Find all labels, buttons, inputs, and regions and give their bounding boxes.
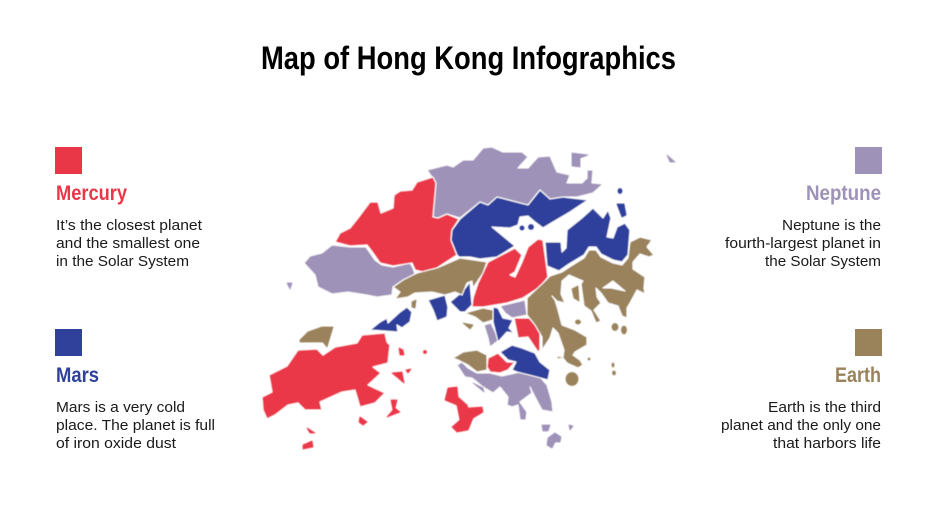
text: Neptune description: the Solar System [765,254,881,270]
text: Mercury description [56,218,202,270]
icon: Neptune colour swatch [855,147,882,174]
heading: Mars: Mars [56,364,99,387]
panel: Mars [55,329,215,452]
icon: Mercury colour swatch [55,147,82,174]
icon: Earth colour swatch [855,329,882,356]
map regions: purple [287,147,675,448]
heading: Mercury: Mercury [56,182,127,205]
text: Neptune description [725,218,881,270]
heading: Neptune: Neptune [806,182,881,205]
text: Mars description: of iron oxide dust [56,436,176,452]
map regions: red [262,177,548,449]
map of Hong Kong [262,147,675,449]
text: Neptune description: fourth-largest planet in [725,236,881,252]
map regions: brown [300,237,654,386]
heading: Earth: Earth [835,364,881,387]
text: Neptune description: Neptune is the [782,218,881,234]
text: Mercury description: It’s the closest planet [56,218,202,234]
text: Mercury description: and the smallest one [56,236,200,252]
text: Mars description [56,400,215,452]
map regions: blue [370,188,630,380]
text: Earth description [721,400,881,452]
title: Map of Hong Kong Infographics [261,40,676,76]
text: Earth description: planet and the only one [721,418,881,434]
text: Earth description: that harbors life [773,436,881,452]
text: Earth description: Earth is the third [768,400,881,416]
icon: Mars colour swatch [55,329,82,356]
text: Mars description: place. The planet is full [56,418,215,434]
text: Mercury description: in the Solar System [56,254,189,270]
panel: Mercury [55,147,202,270]
panel: Neptune [725,147,882,270]
text: Mars description: Mars is a very cold [56,400,185,416]
panel: Earth [721,329,882,452]
